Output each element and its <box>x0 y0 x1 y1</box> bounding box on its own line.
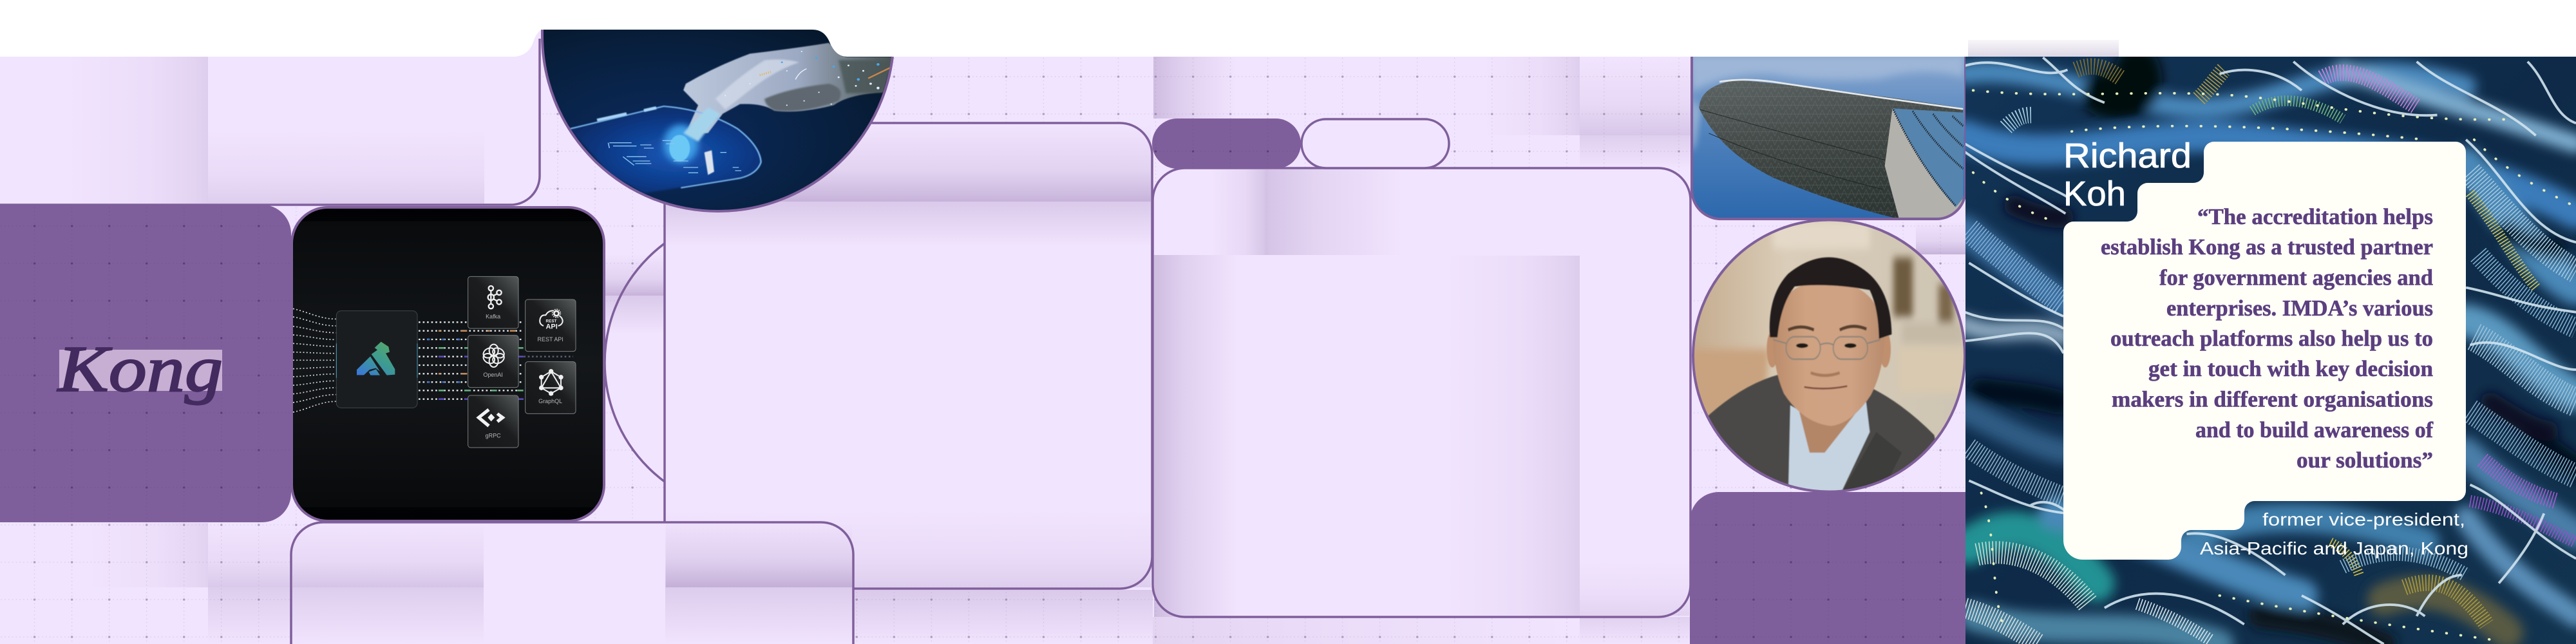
panel: black API gateway diagram <box>292 207 604 521</box>
blurred backdrop <box>1687 222 1966 423</box>
panel shading bands <box>64 57 1965 644</box>
image: skyline building roof against sky <box>1692 57 1966 219</box>
glasses <box>1773 337 1880 359</box>
tile: gRPC <box>468 395 518 448</box>
text block: quote: get in touch with key decision <box>2148 356 2433 381</box>
coloured packets <box>427 331 573 399</box>
panel: filled purple pill <box>1152 118 1301 169</box>
text block: quote: and to build awareness of <box>2195 417 2433 442</box>
incoming dotted traffic lines <box>293 308 336 412</box>
tile: OpenAI: OpenAI <box>483 372 503 378</box>
panel: bottom outline card <box>291 522 853 644</box>
text block: quote <box>2101 204 2434 473</box>
Kong gateway tile <box>336 311 417 408</box>
eyebrows <box>1788 327 1866 330</box>
striped ribbons <box>1965 66 2576 644</box>
panel: top-left outline card <box>0 30 542 205</box>
text block: quote: establish Kong as a trusted partner <box>2101 234 2433 260</box>
image: portrait of Richard Koh <box>1687 213 1971 500</box>
face <box>1773 279 1884 426</box>
text block: quote: for government agencies and <box>2159 265 2434 290</box>
text block: quote: makers in different organisations <box>2112 386 2433 412</box>
icon: Kafka <box>488 286 502 308</box>
tower glass <box>1893 108 1963 207</box>
panel: partial circle outline <box>605 214 902 511</box>
panel: Kong name <box>0 205 291 522</box>
decorative faint strip above image <box>1968 40 2119 57</box>
tile: REST API <box>526 299 576 352</box>
outgoing dotted traffic lines <box>419 322 524 399</box>
tile: REST API: REST <box>546 319 557 324</box>
tile: OpenAI <box>468 336 518 388</box>
tile: GraphQL: GraphQL <box>538 398 562 404</box>
shirt <box>1788 397 1870 500</box>
ears <box>1766 331 1778 368</box>
roof <box>1699 80 1963 218</box>
hand <box>683 43 893 133</box>
fingertip glow <box>663 124 698 163</box>
tile: gRPC: gRPC <box>486 432 501 439</box>
sparkle dots <box>724 51 880 106</box>
panel: purple lower block <box>1690 492 1965 644</box>
tile: REST API: REST API <box>538 336 564 343</box>
company name: Kong <box>57 333 223 406</box>
eyes <box>1796 343 1808 348</box>
image: hand touching holographic screen <box>535 26 902 219</box>
text block: quote: “The accreditation helps <box>2197 204 2433 229</box>
text block: job title: Asia-Pacific and Japan, Kong <box>2200 538 2468 558</box>
text block: job title: former vice-president, <box>2262 509 2465 529</box>
panel: large central outline card <box>665 123 1152 589</box>
text block: quote: outreach platforms also help us to <box>2110 326 2433 351</box>
text block: quote: our solutions” <box>2297 448 2433 473</box>
image: abstract flowing data streams background <box>1965 57 2576 644</box>
tile: REST API: API <box>546 323 558 331</box>
highlight behind company name <box>59 350 222 391</box>
icon: GraphQL hexagon <box>542 372 561 393</box>
text block: job title <box>2200 509 2468 558</box>
quote card background <box>2063 142 2466 560</box>
icon: Kong gorilla logo <box>357 342 395 375</box>
tile: Kafka <box>468 276 518 328</box>
tile: GraphQL <box>526 362 576 413</box>
tower wall <box>1885 109 1963 218</box>
heading: person name: Richard <box>2063 137 2192 175</box>
hair <box>1770 258 1891 339</box>
jacket <box>1703 374 1949 500</box>
icon: OpenAI knot <box>482 345 506 367</box>
panel: outlined pill <box>1302 119 1449 168</box>
nose and smile <box>1811 373 1840 375</box>
bright thin curves <box>1965 57 2576 644</box>
neck <box>1795 390 1866 453</box>
icon: REST API cloud <box>540 309 563 326</box>
screen edge <box>570 106 761 188</box>
clouds <box>1692 57 1963 92</box>
soft colour bands <box>1965 70 2576 644</box>
tile: Kafka: Kafka <box>486 313 500 319</box>
panel: right large outline card <box>1153 168 1690 617</box>
holographic screen <box>570 106 761 193</box>
circle outline <box>542 30 893 211</box>
heading: person name: Koh <box>2063 175 2126 213</box>
sparkle dots <box>1973 90 2573 641</box>
icon: gRPC arrows <box>476 408 506 427</box>
screen readouts <box>608 140 741 173</box>
text block: quote: enterprises. IMDA’s various <box>2166 296 2433 321</box>
heading: person name <box>2063 137 2192 213</box>
